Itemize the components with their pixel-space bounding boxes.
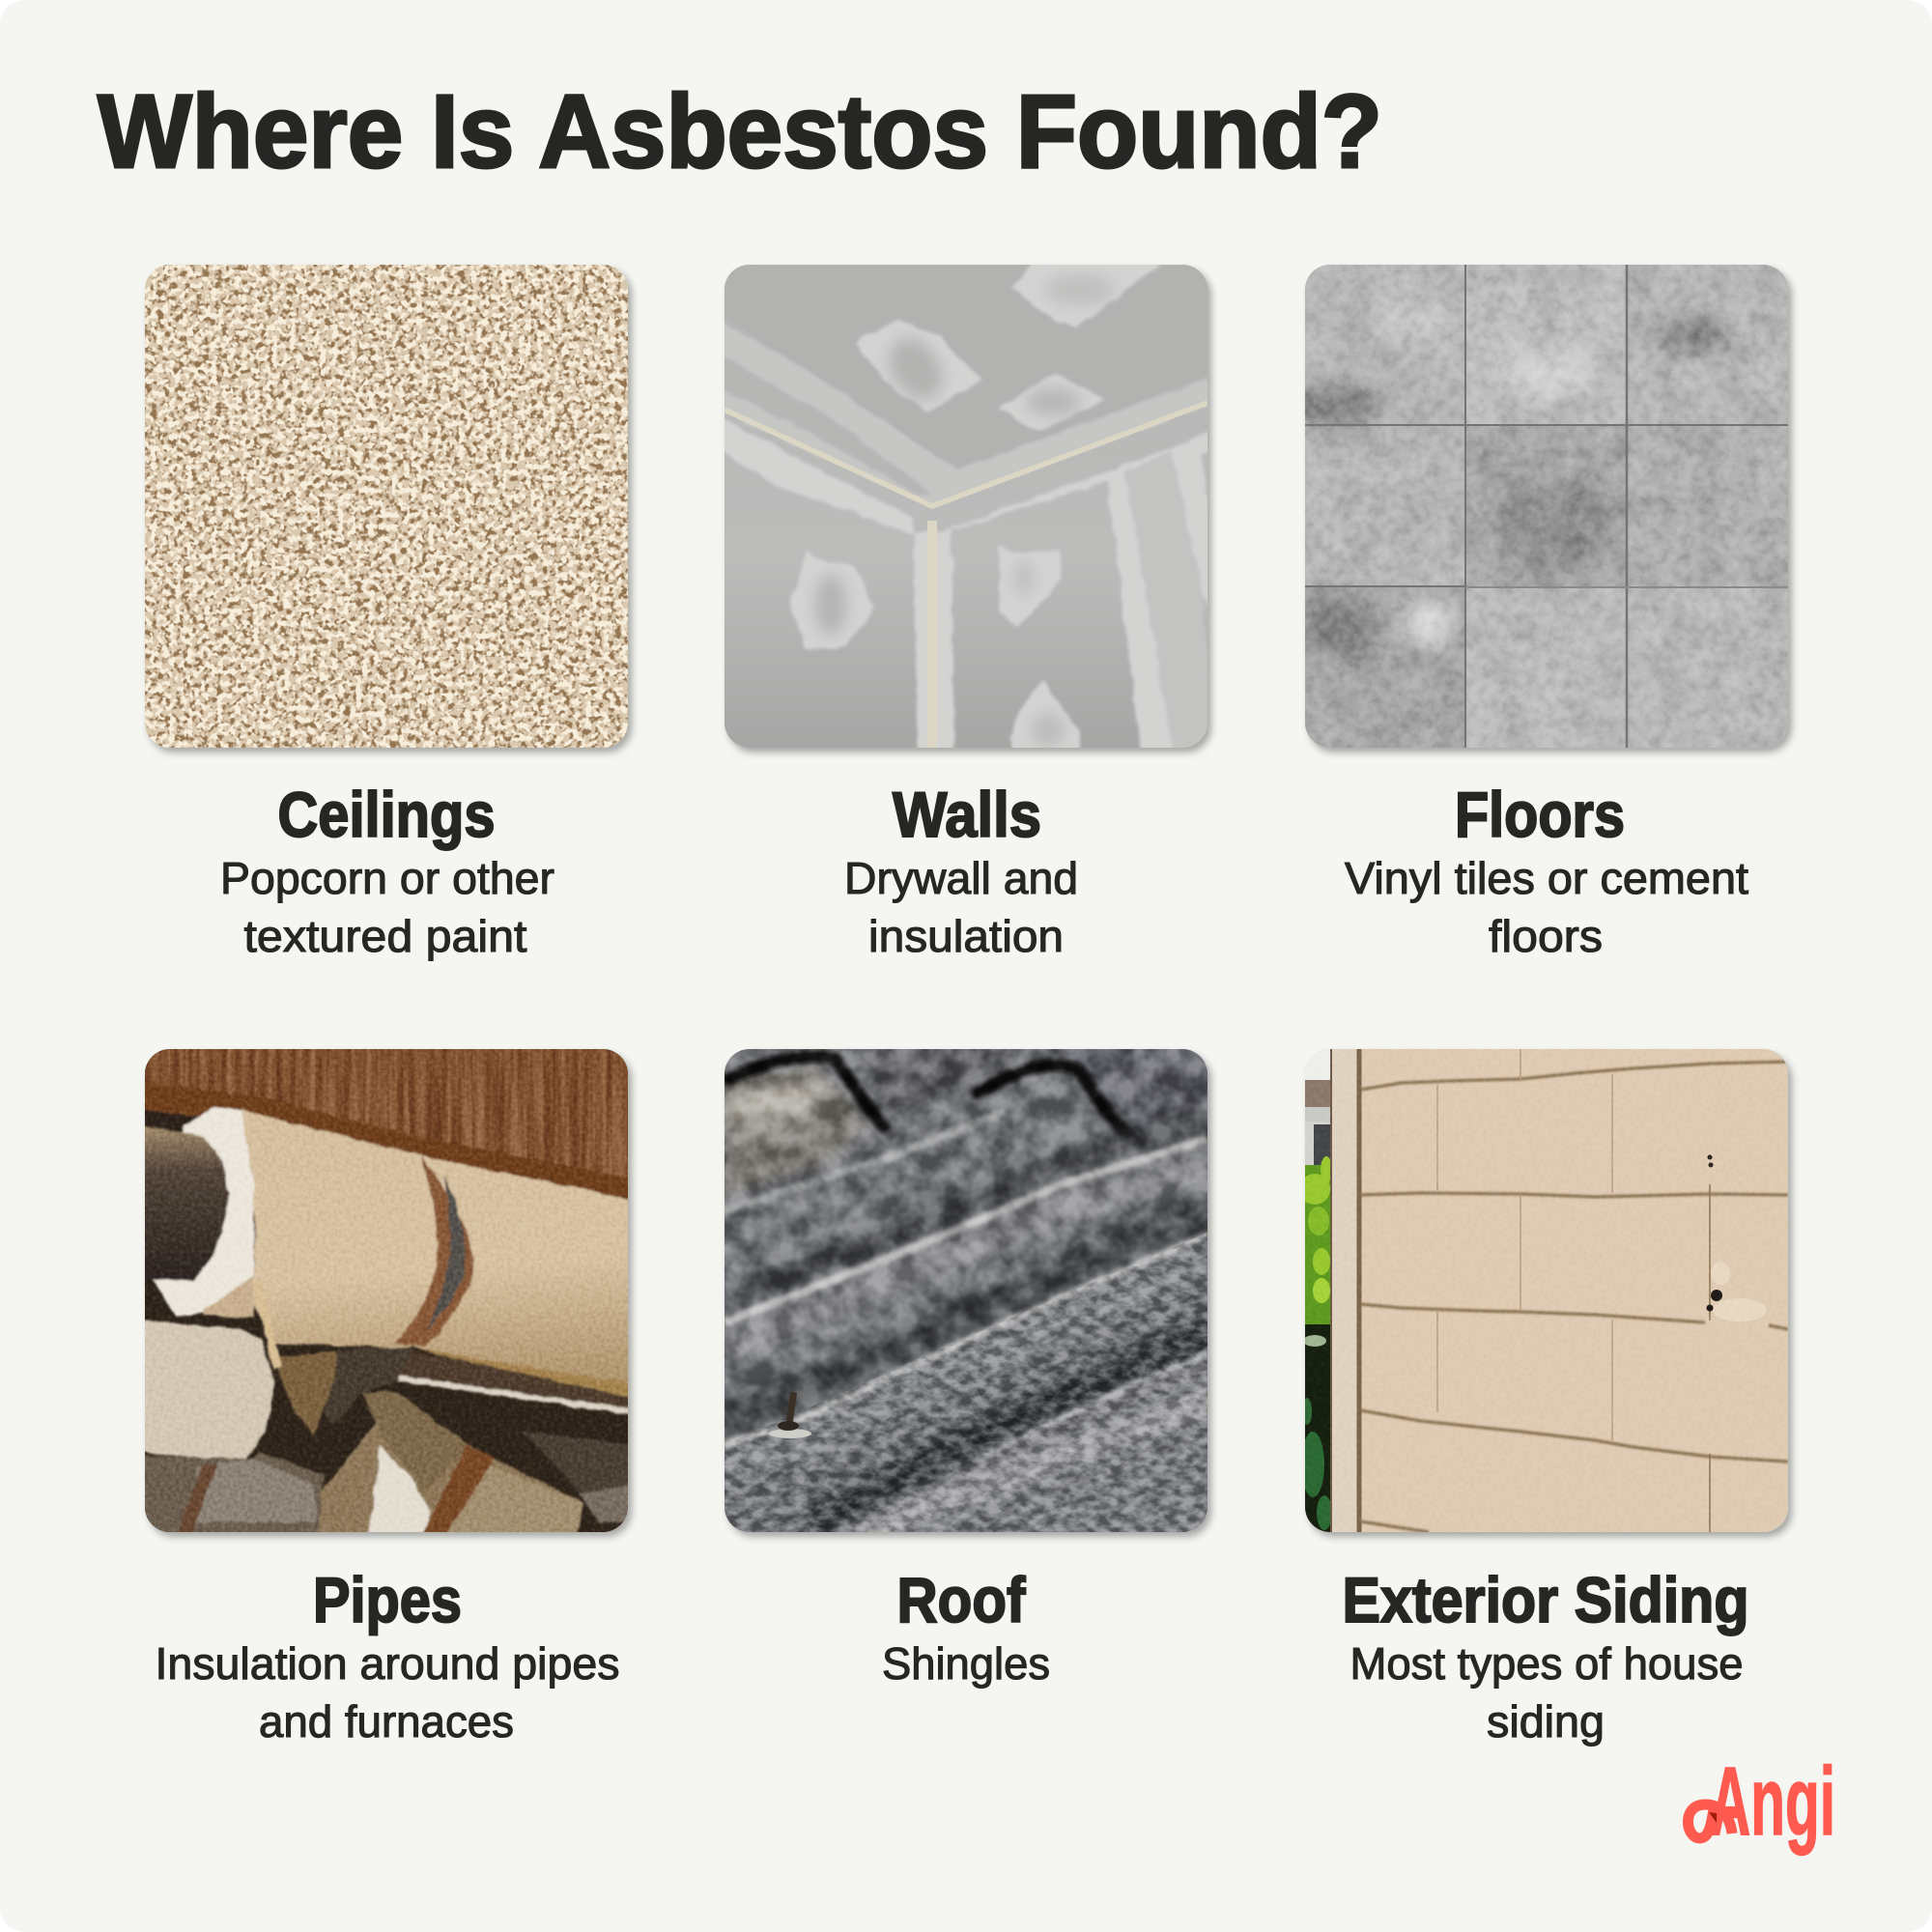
photo: popcorn ceiling texture bbox=[145, 265, 628, 748]
photo: drywall corner bbox=[715, 260, 1217, 757]
lower left pipe bbox=[135, 1320, 275, 1460]
upper tiles bbox=[724, 1066, 869, 1194]
panel: exterior siding bbox=[1299, 1049, 1788, 1747]
ridge highlights bbox=[724, 1112, 1208, 1459]
panel: ceilings bbox=[145, 265, 628, 961]
description: roof: Shingles bbox=[882, 1638, 1050, 1689]
rust band bbox=[394, 1155, 473, 1347]
photo: cement house siding bbox=[1299, 1049, 1788, 1532]
torn flap and metal fitting bbox=[309, 1347, 415, 1426]
description: ceilings: textured paint bbox=[243, 911, 527, 961]
main insulated pipe bbox=[242, 1109, 638, 1386]
lit tile faces bbox=[724, 1163, 1208, 1484]
description: floors: Vinyl tiles or cement bbox=[1345, 853, 1748, 903]
description: floors bbox=[1345, 853, 1748, 961]
description: ceilings bbox=[220, 853, 554, 961]
photo: corrugated asbestos roof bbox=[717, 1049, 1217, 1542]
heading: Walls: Walls bbox=[893, 779, 1041, 850]
nail bbox=[786, 1392, 797, 1423]
description: pipes: Insulation around pipes bbox=[155, 1638, 620, 1689]
panel: walls bbox=[715, 260, 1217, 961]
photo: stone floor tiles bbox=[1286, 265, 1788, 748]
logo: Angi: Angi bbox=[1710, 1747, 1835, 1856]
title: Where Is Asbestos Found? bbox=[98, 72, 1382, 189]
valley shadows bbox=[724, 1119, 1208, 1527]
pipe end: white ring bbox=[152, 1107, 254, 1317]
description: exterior siding: Most types of house bbox=[1350, 1638, 1743, 1689]
description: pipes bbox=[155, 1638, 620, 1747]
description: exterior siding bbox=[1350, 1638, 1743, 1747]
description: exterior siding: siding bbox=[1487, 1696, 1605, 1747]
description: walls: insulation bbox=[868, 911, 1064, 961]
description: ceilings: Popcorn or other bbox=[220, 853, 554, 903]
panel: pipes bbox=[135, 1049, 638, 1747]
description: walls: Drywall and bbox=[844, 853, 1078, 903]
heading: Pipes: Pipes bbox=[313, 1564, 462, 1635]
description: pipes: and furnaces bbox=[259, 1696, 514, 1747]
lower background bbox=[135, 1453, 324, 1542]
panel: floors bbox=[1286, 265, 1788, 961]
description: floors: floors bbox=[1489, 911, 1603, 961]
photo: insulated pipes bbox=[135, 1049, 638, 1542]
description: walls bbox=[844, 853, 1078, 961]
heading: Ceilings: Ceilings bbox=[278, 779, 495, 850]
logo: Angi bbox=[1689, 1747, 1835, 1856]
heading: Floors: Floors bbox=[1455, 779, 1625, 850]
torn cardboard wrap bbox=[319, 1392, 584, 1542]
panel: roof bbox=[717, 1049, 1217, 1689]
heading: Roof: Roof bbox=[896, 1564, 1026, 1635]
heading: Exterior Siding: Exterior Siding bbox=[1343, 1564, 1748, 1635]
